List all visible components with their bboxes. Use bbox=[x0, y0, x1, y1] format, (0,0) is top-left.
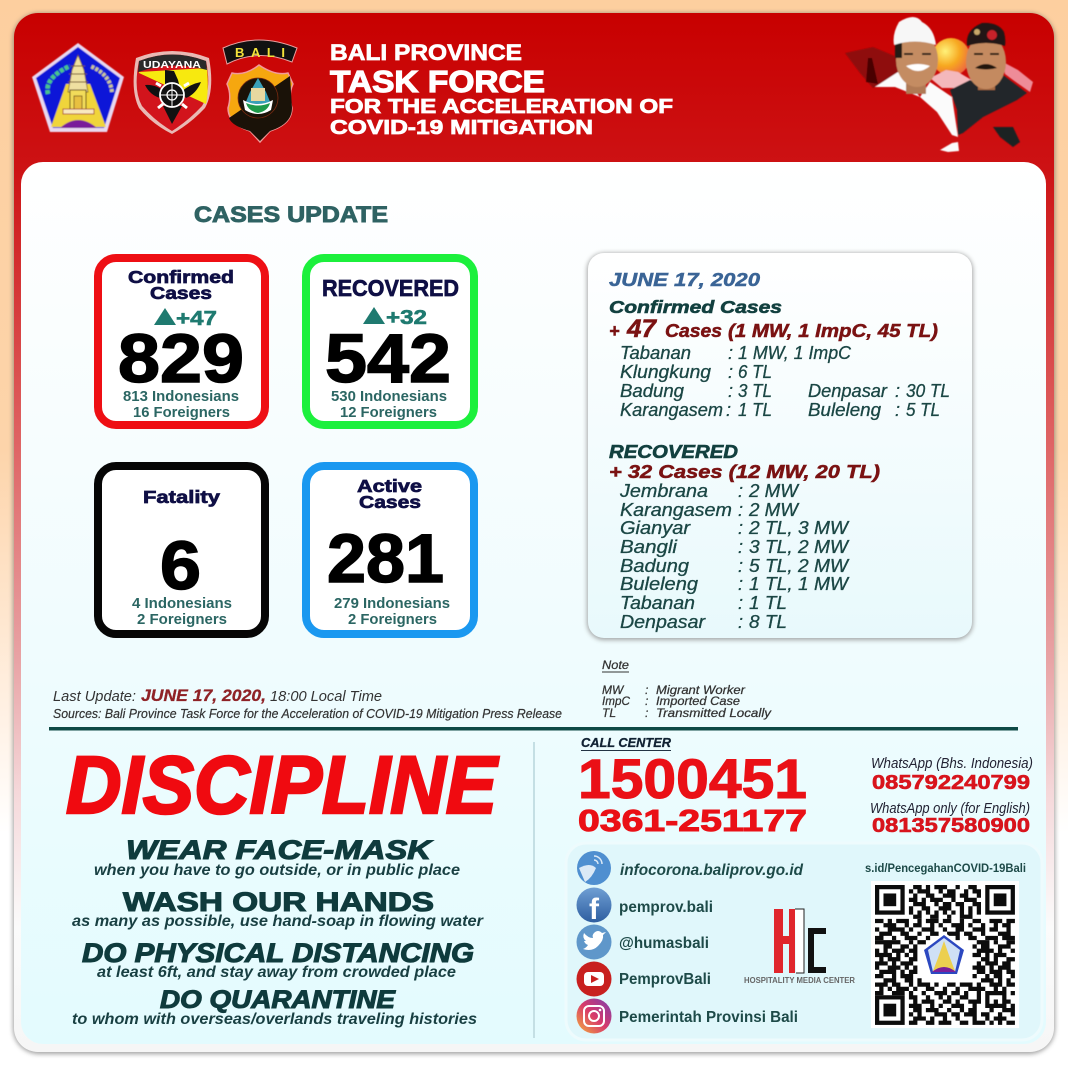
recovered regions: Karangasem bbox=[620, 500, 732, 520]
confirmed heading: Confirmed Cases bbox=[609, 297, 782, 317]
panel: social media and QR bbox=[566, 843, 1042, 1040]
recovered regions: Denpasar bbox=[620, 612, 706, 632]
recovered regions: 5 TL, 2 MW bbox=[749, 556, 850, 576]
rule detail: at least 6ft, and stay away from crowded place bbox=[97, 964, 456, 981]
recovered heading: RECOVERED bbox=[609, 442, 738, 462]
breakdown: 279 Indonesians bbox=[334, 596, 450, 612]
confirmed summary: (1 MW, 1 ImpC, 45 TL) bbox=[728, 321, 938, 341]
recovered regions: : bbox=[738, 556, 743, 576]
shield name: UDAYANA bbox=[143, 60, 201, 71]
logo: hospitality media center: HOSPITALITY MEDIA CENTER bbox=[744, 976, 855, 985]
confirmed regions: : bbox=[895, 400, 900, 420]
total value: 281 bbox=[327, 520, 444, 597]
breakdown: 530 Indonesians bbox=[331, 389, 447, 405]
note legend: Migrant Worker bbox=[656, 683, 746, 697]
panel date: JUNE 17, 2020 bbox=[609, 269, 761, 290]
recovered regions: : bbox=[738, 481, 743, 501]
recovered summary: + 32 Cases (12 MW, 20 TL) bbox=[609, 462, 880, 482]
rule detail: when you have to go outside, or in public place bbox=[94, 862, 460, 879]
website: infocorona.baliprov.go.id bbox=[620, 862, 804, 879]
whatsapp contacts: WhatsApp only (for English) bbox=[870, 801, 1030, 817]
breakdown foreigners: 12 Foreigners bbox=[340, 405, 437, 421]
recovered regions: 2 MW bbox=[748, 500, 800, 520]
logo: Bali police shield bbox=[223, 40, 297, 142]
call center: CALL CENTER bbox=[581, 736, 671, 750]
logo: hospitality media center bbox=[744, 909, 855, 985]
last update line: Last Update: bbox=[53, 688, 136, 705]
recovered regions: 8 TL bbox=[749, 612, 787, 632]
last update line bbox=[53, 686, 382, 705]
instagram handle: Pemerintah Provinsi Bali bbox=[619, 1009, 798, 1026]
confirmed regions: : bbox=[726, 400, 731, 420]
whatsapp contacts: 081357580900 bbox=[872, 815, 1030, 837]
rule: face mask: WEAR FACE-MASK bbox=[126, 835, 434, 865]
note legend: : bbox=[645, 683, 648, 697]
recovered regions: Buleleng bbox=[620, 574, 698, 594]
recovered regions: 1 TL bbox=[749, 593, 787, 613]
QR code bbox=[871, 881, 1019, 1028]
recovered regions: Badung bbox=[620, 556, 689, 576]
confirmed regions bbox=[620, 343, 950, 420]
recovered regions: Jembrana bbox=[619, 481, 708, 501]
recovered regions: 2 TL, 3 MW bbox=[748, 518, 850, 538]
icon: facebook: f bbox=[589, 893, 600, 926]
confirmed regions: 5 TL bbox=[906, 400, 940, 420]
card: confirmed cases bbox=[98, 258, 265, 425]
confirmed regions: 1 MW, 1 ImpC bbox=[738, 343, 852, 363]
increase triangle bbox=[363, 307, 385, 324]
icon: youtube bbox=[576, 962, 612, 996]
recovered regions: 1 TL, 1 MW bbox=[749, 574, 850, 594]
icon: facebook bbox=[576, 888, 612, 926]
call center bbox=[578, 736, 807, 838]
title line 3: FOR THE ACCELERATION OF bbox=[330, 95, 673, 118]
card heading line 2: Cases bbox=[150, 283, 212, 303]
total value: 829 bbox=[118, 320, 244, 397]
confirmed regions: Buleleng bbox=[808, 400, 881, 420]
confirmed regions: 3 TL bbox=[738, 381, 772, 401]
confirmed regions: Denpasar bbox=[808, 381, 888, 401]
note legend: Transmitted Locally bbox=[656, 706, 772, 720]
breakdown: 4 Indonesians bbox=[132, 596, 232, 612]
recovered regions: 2 MW bbox=[748, 481, 800, 501]
discipline heading: DISCIPLINE bbox=[66, 740, 499, 831]
breakdown: 813 Indonesians bbox=[123, 389, 239, 405]
last update line: JUNE 17, 2020, bbox=[141, 686, 266, 705]
recovered regions: : bbox=[738, 500, 743, 520]
header title bbox=[330, 40, 673, 139]
note legend: ImpC bbox=[602, 694, 630, 708]
card: recovered bbox=[306, 258, 474, 425]
confirmed regions: : bbox=[895, 381, 900, 401]
note legend: : bbox=[645, 694, 648, 708]
rule: quarantine: DO QUARANTINE bbox=[160, 986, 396, 1014]
confirmed regions: : bbox=[728, 343, 733, 363]
recovered regions: Tabanan bbox=[620, 593, 695, 613]
card heading line 2: Cases bbox=[359, 492, 421, 512]
card heading: Active bbox=[357, 476, 422, 496]
sources line: Sources: Bali Province Task Force for the Acceleration of COVID-19 Mitigation Press Release bbox=[53, 706, 562, 721]
discipline rules bbox=[72, 835, 484, 1028]
total value: 6 bbox=[160, 527, 201, 604]
total value: 542 bbox=[325, 320, 451, 397]
facebook handle: pemprov.bali bbox=[619, 899, 713, 916]
note legend: : bbox=[645, 706, 648, 720]
increase value: +47 bbox=[176, 307, 217, 330]
card heading: RECOVERED bbox=[322, 275, 459, 301]
recovered regions: : bbox=[738, 537, 743, 557]
recovered regions: : bbox=[738, 518, 743, 538]
title line 2: TASK FORCE bbox=[330, 64, 545, 99]
confirmed summary: Cases bbox=[665, 321, 722, 341]
last update line: 18:00 Local Time bbox=[270, 688, 382, 705]
portraits on Bali map bbox=[845, 17, 1033, 152]
landline: 0361-251177 bbox=[578, 803, 807, 838]
increase value: +32 bbox=[386, 306, 427, 329]
note legend bbox=[602, 658, 772, 720]
whatsapp contacts bbox=[870, 756, 1033, 837]
confirmed regions: Karangasem bbox=[620, 400, 723, 420]
recovered regions bbox=[619, 481, 850, 632]
rule detail: to whom with overseas/overlands traveling histories bbox=[72, 1011, 477, 1028]
white content panel bbox=[21, 162, 1046, 1044]
main hotline: 1500451 bbox=[578, 747, 807, 810]
confirmed regions: 6 TL bbox=[738, 362, 772, 382]
increase triangle bbox=[154, 308, 176, 325]
breakdown foreigners: 2 Foreigners bbox=[137, 612, 227, 628]
whatsapp contacts: WhatsApp (Bhs. Indonesia) bbox=[871, 756, 1033, 772]
recovered regions: : bbox=[738, 574, 743, 594]
panel: daily details bbox=[587, 253, 973, 640]
card: fatality bbox=[98, 466, 265, 634]
card: active cases bbox=[306, 466, 474, 634]
breakdown foreigners: 2 Foreigners bbox=[348, 612, 437, 628]
rule detail: as many as possible, use hand-soap in flowing water bbox=[72, 913, 484, 930]
confirmed regions: : bbox=[728, 362, 733, 382]
logo: Udayana shield bbox=[134, 51, 211, 134]
logo: Bali province pentagon bbox=[32, 43, 124, 132]
confirmed regions: Badung bbox=[620, 381, 684, 401]
recovered regions: : bbox=[738, 612, 743, 632]
icon: website globe bbox=[577, 851, 611, 885]
icon: twitter bbox=[576, 924, 612, 960]
whatsapp contacts: 085792240799 bbox=[872, 772, 1030, 794]
title line 1: BALI PROVINCE bbox=[330, 40, 522, 65]
confirmed regions: : bbox=[728, 381, 733, 401]
QR link: s.id/PencegahanCOVID-19Bali bbox=[865, 861, 1026, 875]
recovered regions: 3 TL, 2 MW bbox=[749, 537, 850, 557]
rule: distancing: DO PHYSICAL DISTANCING bbox=[82, 938, 474, 968]
note legend: TL bbox=[602, 706, 616, 720]
recovered regions: Bangli bbox=[620, 537, 678, 557]
recovered regions: Gianyar bbox=[620, 518, 691, 538]
twitter handle: @humasbali bbox=[619, 935, 709, 952]
note legend: Imported Case bbox=[656, 694, 740, 708]
breakdown foreigners: 16 Foreigners bbox=[133, 405, 230, 421]
heading: cases update: CASES UPDATE bbox=[194, 202, 388, 227]
confirmed regions: Tabanan bbox=[620, 343, 691, 363]
youtube handle: PemprovBali bbox=[619, 971, 711, 988]
banner name: BALI bbox=[235, 45, 285, 60]
title line 4: COVID-19 MITIGATION bbox=[330, 116, 593, 139]
icon: instagram bbox=[576, 998, 612, 1034]
card heading: Confirmed bbox=[128, 267, 234, 287]
rule: wash hands: WASH OUR HANDS bbox=[123, 887, 434, 917]
confirmed regions: 1 TL bbox=[738, 400, 772, 420]
note legend: Note bbox=[602, 658, 629, 672]
card heading: Fatality bbox=[143, 487, 220, 507]
confirmed regions: 30 TL bbox=[906, 381, 950, 401]
note legend: MW bbox=[602, 683, 625, 697]
recovered regions: : bbox=[738, 593, 743, 613]
confirmed summary: 47 bbox=[626, 315, 657, 343]
confirmed summary: + bbox=[609, 321, 620, 341]
confirmed regions: Klungkung bbox=[620, 362, 711, 382]
confirmed summary bbox=[609, 315, 938, 343]
